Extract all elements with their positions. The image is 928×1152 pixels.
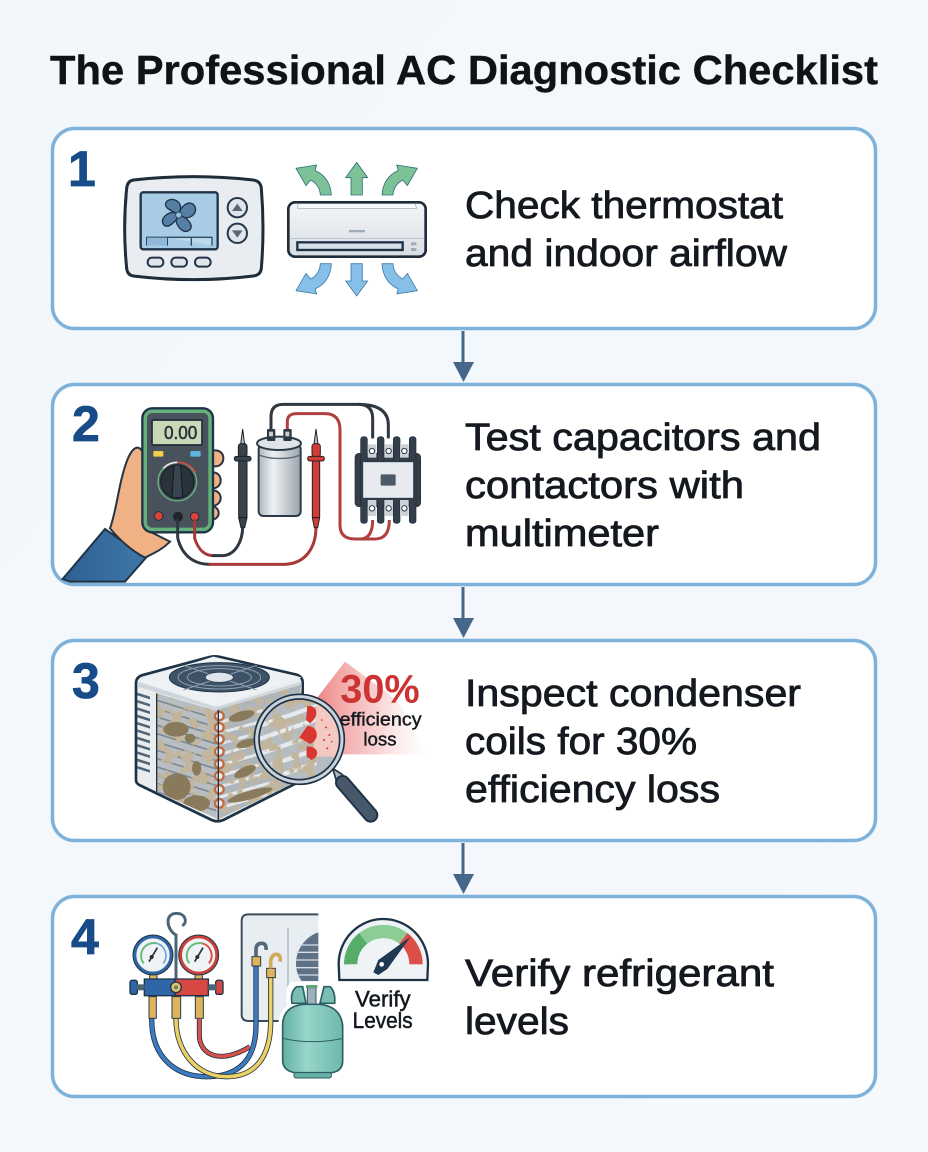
step 1 text (465, 185, 788, 275)
callout text: 30% efficiency loss: 30% (340, 667, 420, 711)
icon: black probe (234, 429, 251, 528)
step 2 text: multimeter (465, 513, 659, 555)
icon: red gauge (179, 935, 219, 975)
step 3 text: coils for 30% (465, 721, 697, 763)
icon: blue gauge (133, 935, 173, 975)
step 3 text (465, 673, 801, 811)
card outline 3 (52, 640, 876, 840)
right coil face (217, 683, 302, 823)
icon: hose fittings (149, 957, 275, 1018)
icon: refrigerant gauge set (130, 913, 428, 1078)
callout: red loss highlight (310, 662, 428, 754)
icon: thermostat (125, 177, 263, 280)
icon: fingers (204, 450, 223, 520)
gauge caption: Verify (355, 987, 411, 1012)
step 3 text: efficiency loss (465, 769, 720, 811)
arrow 1 to 2 (453, 331, 474, 382)
card outline 1 (52, 128, 876, 328)
icon: manifold body (130, 979, 223, 996)
callout text: 30% efficiency loss: loss (363, 728, 397, 749)
icon: red hose (199, 1019, 250, 1056)
number 3: 3 (72, 653, 100, 709)
step 1 text: Check thermostat (465, 185, 783, 227)
panel: step 2 (52, 384, 876, 584)
icon: contactor (355, 437, 421, 523)
icon: red probe (308, 429, 324, 528)
left coil face (156, 692, 218, 820)
card outline 2 (52, 384, 876, 584)
step 4 text: levels (465, 1001, 569, 1043)
icon: blue and yellow hoses (152, 965, 271, 1077)
icon: manifold hook (168, 913, 185, 978)
step 3 text: Inspect condenser (465, 673, 801, 715)
icon: condenser unit (136, 656, 303, 823)
icon: test leads (178, 520, 316, 564)
callout text: 30% efficiency loss (340, 667, 422, 749)
icon: outdoor unit panel (242, 914, 318, 1021)
icon: blue airflow arrows (296, 264, 417, 296)
icon: level gauge (339, 919, 428, 980)
icon: multimeter test setup (63, 404, 421, 582)
icon: green airflow arrows (296, 162, 417, 195)
icon: magnifying glass (254, 694, 371, 815)
icon: condenser unit with magnifier (136, 656, 428, 823)
icon: wall AC unit (288, 202, 426, 257)
icon: sleeve (63, 529, 146, 582)
step 4 text (465, 953, 774, 1043)
step 2 text: Test capacitors and (465, 417, 821, 459)
icon: hand (110, 448, 170, 558)
number 4: 4 (71, 909, 99, 965)
icon: multimeter (142, 408, 213, 532)
arrow 2 to 3 (453, 587, 474, 638)
panel: step 4 (52, 896, 876, 1096)
icon: capacitor (257, 429, 301, 516)
left louvres (137, 693, 150, 773)
gauge caption (353, 987, 413, 1033)
icon: refrigerant tank (281, 982, 343, 1078)
callout text: 30% efficiency loss: efficiency (340, 709, 422, 730)
title: The Professional AC Diagnostic Checklist (50, 47, 878, 93)
icon: hose connectors (256, 943, 280, 968)
number 1: 1 (68, 141, 96, 197)
gauge caption: Levels (353, 1008, 413, 1033)
step 2 text (465, 417, 821, 555)
step 4 text: Verify refrigerant (465, 953, 774, 995)
panel: step 3 (52, 640, 876, 840)
panel: step 1 (52, 128, 876, 328)
icon: wiring (271, 404, 389, 539)
icon: multimeter: 0.00 (164, 422, 197, 443)
step 1 text: and indoor airflow (465, 233, 788, 275)
card outline 4 (52, 896, 876, 1096)
step 2 text: contactors with (465, 465, 744, 507)
icon: thermostat and AC airflow (125, 162, 426, 296)
copper tube ends (215, 712, 224, 808)
arrow 3 to 4 (453, 843, 474, 894)
number 2: 2 (72, 396, 100, 452)
